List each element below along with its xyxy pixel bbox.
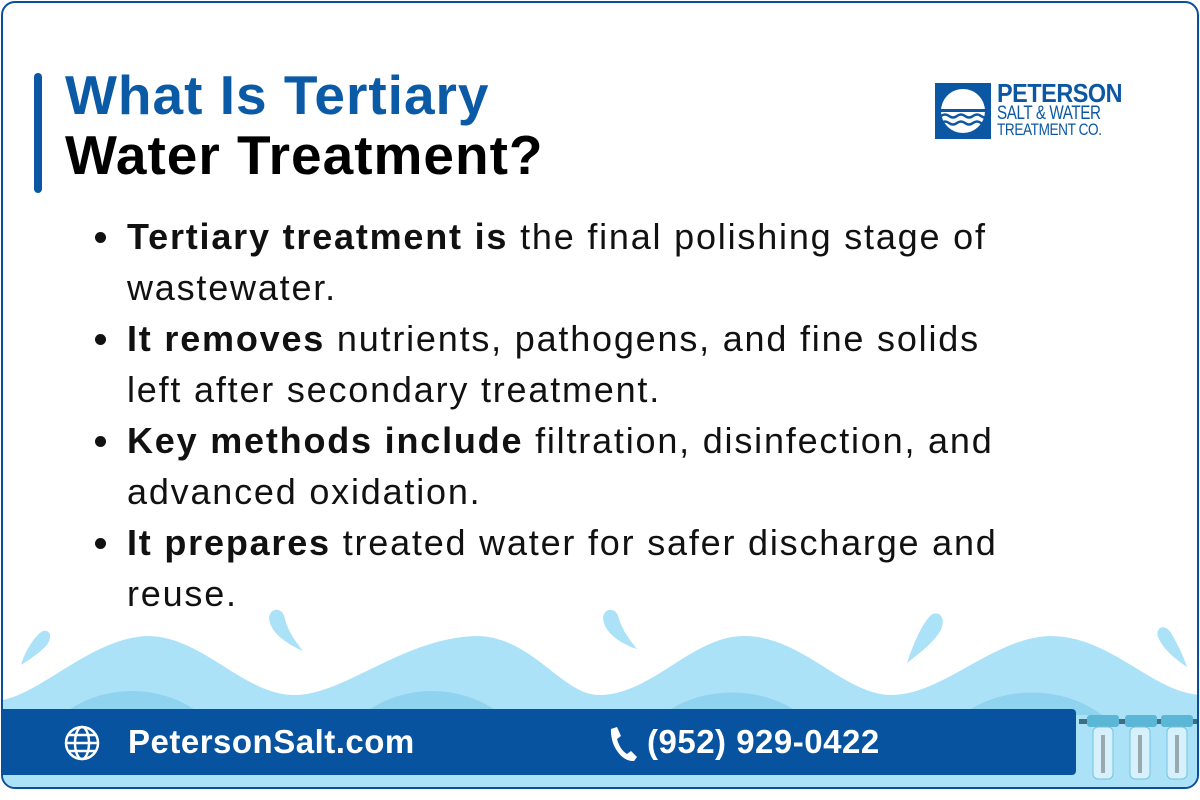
bullet 3: advanced oxidation.: [127, 471, 481, 512]
bullet 2: left after secondary treatment.: [127, 369, 661, 410]
bullet 1: [95, 216, 987, 308]
bullet 2: It removes nutrients, pathogens, and fine solids: [127, 318, 980, 359]
title: What Is Tertiary: [65, 64, 490, 126]
title: [65, 64, 544, 186]
logo: [935, 78, 1122, 139]
bullet 1: wastewater.: [127, 267, 337, 308]
footer bar: [1, 709, 1076, 775]
bullet 4: reuse.: [127, 573, 238, 614]
title: Water Treatment?: [65, 124, 544, 186]
accent bar: [34, 73, 42, 193]
website: PetersonSalt.com: [128, 723, 415, 760]
icon: globe: [64, 726, 100, 760]
drops: [21, 610, 1187, 667]
bullet 3: Key methods include filtration, disinfection, and: [127, 420, 994, 461]
bullet 2: [95, 318, 980, 410]
bullet 4: It prepares treated water for safer discharge and: [127, 522, 998, 563]
icon: phone: [610, 727, 637, 761]
logo: SALT & WATER: [997, 103, 1101, 124]
bullet 4: [95, 522, 998, 614]
phone number: (952) 929-0422: [647, 723, 880, 760]
logo: PETERSON: [997, 78, 1122, 108]
icon: logo mark: [935, 83, 991, 139]
icon: water filters: [1079, 715, 1197, 780]
bullet 3: [95, 420, 994, 512]
bullet list: [95, 216, 998, 614]
waves: [3, 636, 1197, 787]
bullet 1: Tertiary treatment is the final polishing stage of: [127, 216, 987, 257]
logo: TREATMENT CO.: [997, 120, 1102, 139]
